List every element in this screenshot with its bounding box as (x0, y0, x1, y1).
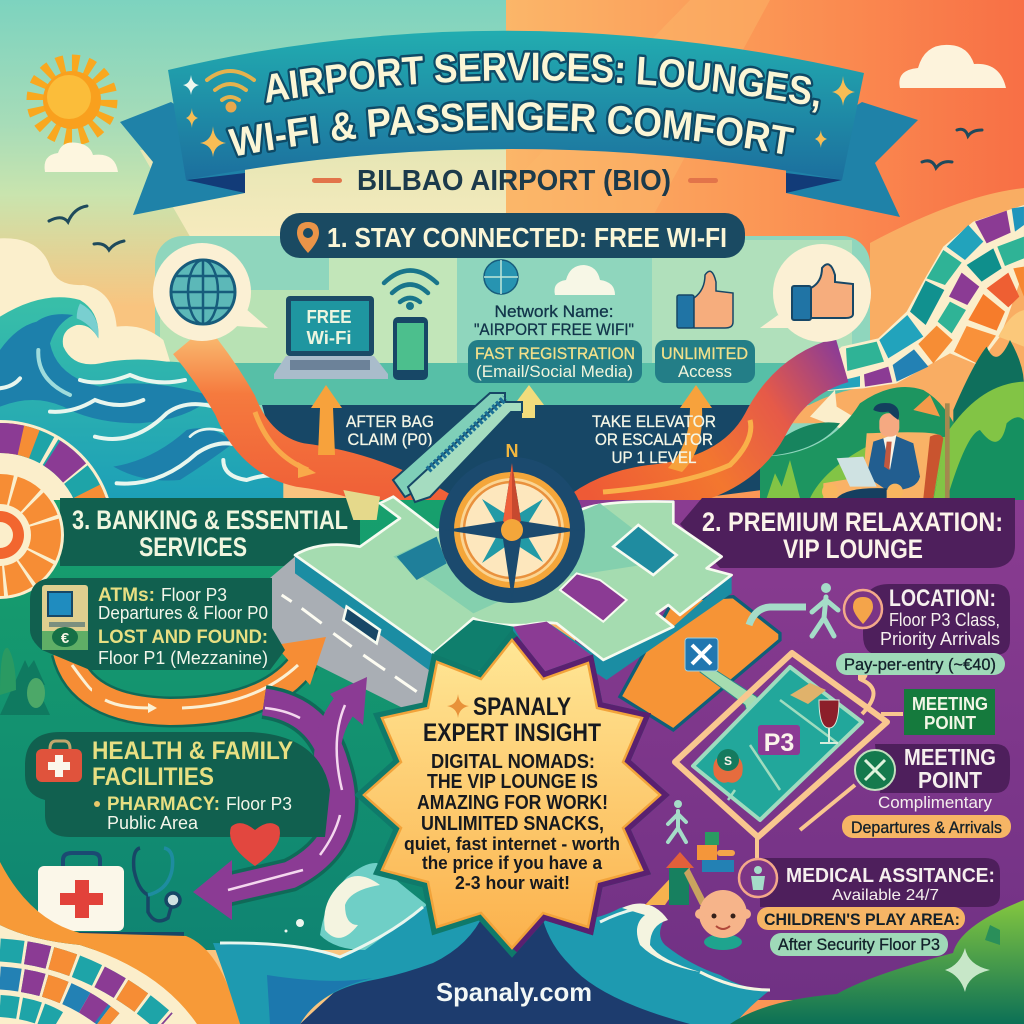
text block: location: Priority Arrivals (880, 629, 1000, 649)
badge: children's play area: CHILDREN'S PLAY AREA: (764, 910, 960, 929)
panel: health and family facilities: PHARMACY: (107, 794, 220, 815)
title text: AIRPORT SERVICES: LOUNGES, (264, 50, 821, 116)
icon: right cloud (899, 45, 1006, 88)
icon: walking figure top (812, 583, 838, 636)
panel: atms and lost and found: Departures & Floor P0 (98, 603, 268, 623)
sign: meeting point green: POINT (924, 713, 976, 733)
callout body: quiet, fast internet - worth (404, 833, 620, 854)
panel: atms and lost and found: LOST AND FOUND: (98, 627, 268, 648)
illustration: green hills bottom right (730, 900, 1024, 1024)
mosaic middle row (788, 237, 1024, 407)
badge: fast registration: (Email/Social Media) (476, 362, 633, 381)
callout body: DIGITAL NOMADS: (431, 751, 595, 773)
icon: laptop with free wi-fi: FREE (306, 307, 352, 327)
arrow: walk to lounge (749, 607, 806, 625)
arrow: guide head left route (298, 462, 316, 478)
icon: thumbs up (677, 271, 733, 328)
heading: 3. banking and essential services (60, 498, 360, 566)
title text (226, 50, 821, 158)
heading: 1. stay connected (280, 213, 745, 258)
heading: 3. banking and essential services: 3. BANKING & ESSENTIAL (72, 505, 348, 535)
panel: health and family facilities: HEALTH & FAMILY (92, 737, 293, 765)
icon: medical circle (739, 859, 777, 897)
text: network name: "AIRPORT FREE WIFI" (474, 320, 634, 339)
panel: atms and lost and found: Floor P1 (Mezzanine) (98, 648, 268, 668)
icon: heart (230, 823, 280, 866)
badge: after security: After Security Floor P3 (778, 935, 940, 954)
text: after bag claim (346, 412, 434, 449)
label: p3: P3 (764, 729, 794, 757)
icon: cash machine (42, 585, 88, 650)
map: p3 lounge floor (693, 667, 862, 820)
badge: unlimited access: Access (678, 362, 732, 381)
text: take elevator: OR ESCALATOR (595, 430, 713, 449)
illustration: mosaic ring left (0, 420, 115, 650)
icon: thumbs up speech bubble (760, 244, 871, 342)
heading: 2. premium relaxation vip lounge (680, 498, 1015, 568)
icon: meeting circle (855, 750, 895, 790)
footer brand: Spanaly.com (436, 977, 592, 1007)
ribbon band (168, 31, 864, 180)
icon: globe speech bubble (153, 243, 268, 341)
text: network name (474, 302, 634, 339)
text: network name: Network Name: (494, 302, 614, 321)
birds (49, 126, 982, 250)
callout body: UNLIMITED SNACKS, (421, 813, 604, 835)
illustration: left wave (213, 863, 484, 1024)
heading: 1. stay connected: 1. STAY CONNECTED: FREE WI-FI (327, 222, 727, 253)
arrow: up to free wi-fi (311, 385, 342, 455)
panel: health and family facilities: Floor P3 (226, 794, 292, 814)
badge: fast registration: FAST REGISTRATION (475, 344, 635, 363)
panel: atms and lost and found (30, 578, 285, 670)
panel: stay connected backdrop (155, 236, 870, 512)
icon: left cloud (45, 142, 118, 172)
callout body: 2-3 hour wait! (455, 872, 570, 893)
icon: walking figure lower (668, 800, 686, 842)
icon: trees (0, 648, 50, 715)
mosaic inner row (954, 267, 1024, 363)
arrow: up to registration (514, 385, 544, 418)
icon: pastries (790, 683, 826, 704)
panel: health and family facilities: FACILITIES (92, 763, 214, 791)
icon: red first-aid kit (36, 741, 82, 782)
text block: location: LOCATION: (889, 585, 996, 612)
arrow: up to unlimited access (668, 385, 712, 472)
badge: fast registration (468, 340, 642, 383)
illustration: right mosaic road and hills (760, 205, 1024, 500)
illustration: compass (439, 441, 585, 603)
illustration: bottom left mosaic (0, 925, 210, 1024)
map: road (260, 557, 460, 720)
badge: departures and arrivals: Departures & Arrivals (851, 818, 1002, 837)
icon: s map pin: S (724, 754, 732, 768)
map: pit in front of star (433, 620, 513, 673)
badge: pay per entry: Pay-per-entry (~€40) (844, 655, 996, 674)
panel: atms and lost and found: Floor P3 (161, 585, 227, 605)
callout body: AMAZING FOR WORK! (417, 792, 608, 814)
text: after bag claim: AFTER BAG (346, 412, 434, 431)
text block: medical assistance: Available 24/7 (832, 887, 939, 904)
text block: location: Floor P3 Class, (889, 610, 1000, 630)
icon: baby face (695, 890, 751, 950)
illustration: mosaic sun left (0, 471, 64, 599)
text: take elevator: UP 1 LEVEL (612, 448, 696, 467)
compass letter: N (506, 441, 518, 461)
badge: unlimited access (655, 340, 755, 383)
illustration: navy base (300, 910, 735, 1024)
text: after bag claim: CLAIM (P0) (348, 430, 432, 449)
badge: unlimited access: UNLIMITED (661, 344, 748, 363)
illustration: isometric terminal map (260, 490, 780, 730)
arrow: guide on left route (255, 412, 308, 470)
heading: 3. banking and essential services: SERVICES (139, 532, 247, 562)
arrow: purple route (193, 677, 367, 920)
icon: cash machine: € (61, 630, 70, 647)
map: orange lounge floor (620, 597, 780, 730)
sparkles (183, 75, 855, 157)
panel: purple lounge background (575, 500, 1024, 1000)
icon: laptop with free wi-fi (274, 296, 388, 379)
illustration: traveller with laptop in armchair (822, 395, 950, 500)
subtitle: airport name: BILBAO AIRPORT (BIO) (357, 165, 671, 197)
callout body: the price if you have a (422, 852, 603, 873)
title text: WI-FI & PASSENGER COMFORT (226, 100, 796, 158)
callout body (404, 751, 620, 893)
sign: meeting point green (904, 689, 995, 735)
icon: laptop with free wi-fi: Wi-Fi (306, 328, 352, 348)
illustration: orange swoosh (0, 862, 240, 1024)
text block: meeting point: Complimentary (878, 793, 992, 812)
text: take elevator: TAKE ELEVATOR (592, 412, 716, 431)
icon: s map pin (713, 749, 743, 783)
panel: atms and lost and found: ATMs: (98, 585, 155, 606)
panel: green banking background (0, 500, 450, 950)
arrows: lounge route (757, 675, 903, 860)
sign: meeting point green: MEETING (912, 694, 988, 714)
callout heading: EXPERT INSIGHT (423, 719, 601, 747)
title ribbon (120, 30, 918, 217)
text block: meeting point: POINT (918, 767, 982, 793)
icon: playground slide (645, 852, 708, 905)
mosaic outer row (846, 207, 1024, 371)
heading: 2. premium relaxation vip lounge: VIP LOUNGE (783, 534, 923, 564)
panel: health and family facilities: Public Area (107, 813, 199, 833)
callout heading (423, 693, 601, 747)
ribbon right tail (786, 102, 918, 217)
text block: location (844, 584, 1010, 655)
illustration: left clouds and waves (0, 238, 283, 503)
road: left route (190, 340, 450, 520)
icon: sun (35, 63, 109, 137)
icon: globe and cloud (484, 260, 615, 295)
icon: banner wi-fi (207, 71, 254, 110)
route: p3 floor loop (675, 653, 887, 837)
icon: phone with wi-fi signal (384, 270, 437, 380)
callout body: THE VIP LOUNGE IS (427, 771, 598, 793)
text block: medical assistance: MEDICAL ASSITANCE: (786, 865, 995, 887)
callout: spanaly expert insight star (364, 640, 660, 948)
icon: sparkle (447, 694, 469, 718)
icon: location circle (844, 590, 882, 628)
map: roof (295, 497, 732, 660)
callout heading: SPANALY (473, 693, 571, 721)
icon: toy blocks (697, 832, 735, 872)
panel: health and family facilities (25, 732, 330, 837)
ribbon left tail (120, 102, 245, 215)
text block: meeting point: MEETING (904, 744, 996, 770)
icon: medical case (27, 853, 184, 936)
icon: location pin (297, 222, 319, 253)
label: p3 (758, 725, 800, 757)
sign: x marker and walkway (685, 638, 757, 722)
illustration: escalator (393, 393, 522, 502)
text block: meeting point (855, 744, 1010, 812)
road: right route (570, 360, 842, 525)
text block: medical assistance (739, 858, 1000, 907)
map: wing walls (295, 555, 732, 680)
icon: stethoscope (134, 848, 180, 921)
icon: wine glass (819, 700, 839, 743)
illustration: right wave (543, 904, 770, 1024)
arrow: guide on right route (603, 420, 751, 492)
arrow: orange route to terminal (66, 637, 326, 713)
text: take elevator (592, 412, 716, 467)
